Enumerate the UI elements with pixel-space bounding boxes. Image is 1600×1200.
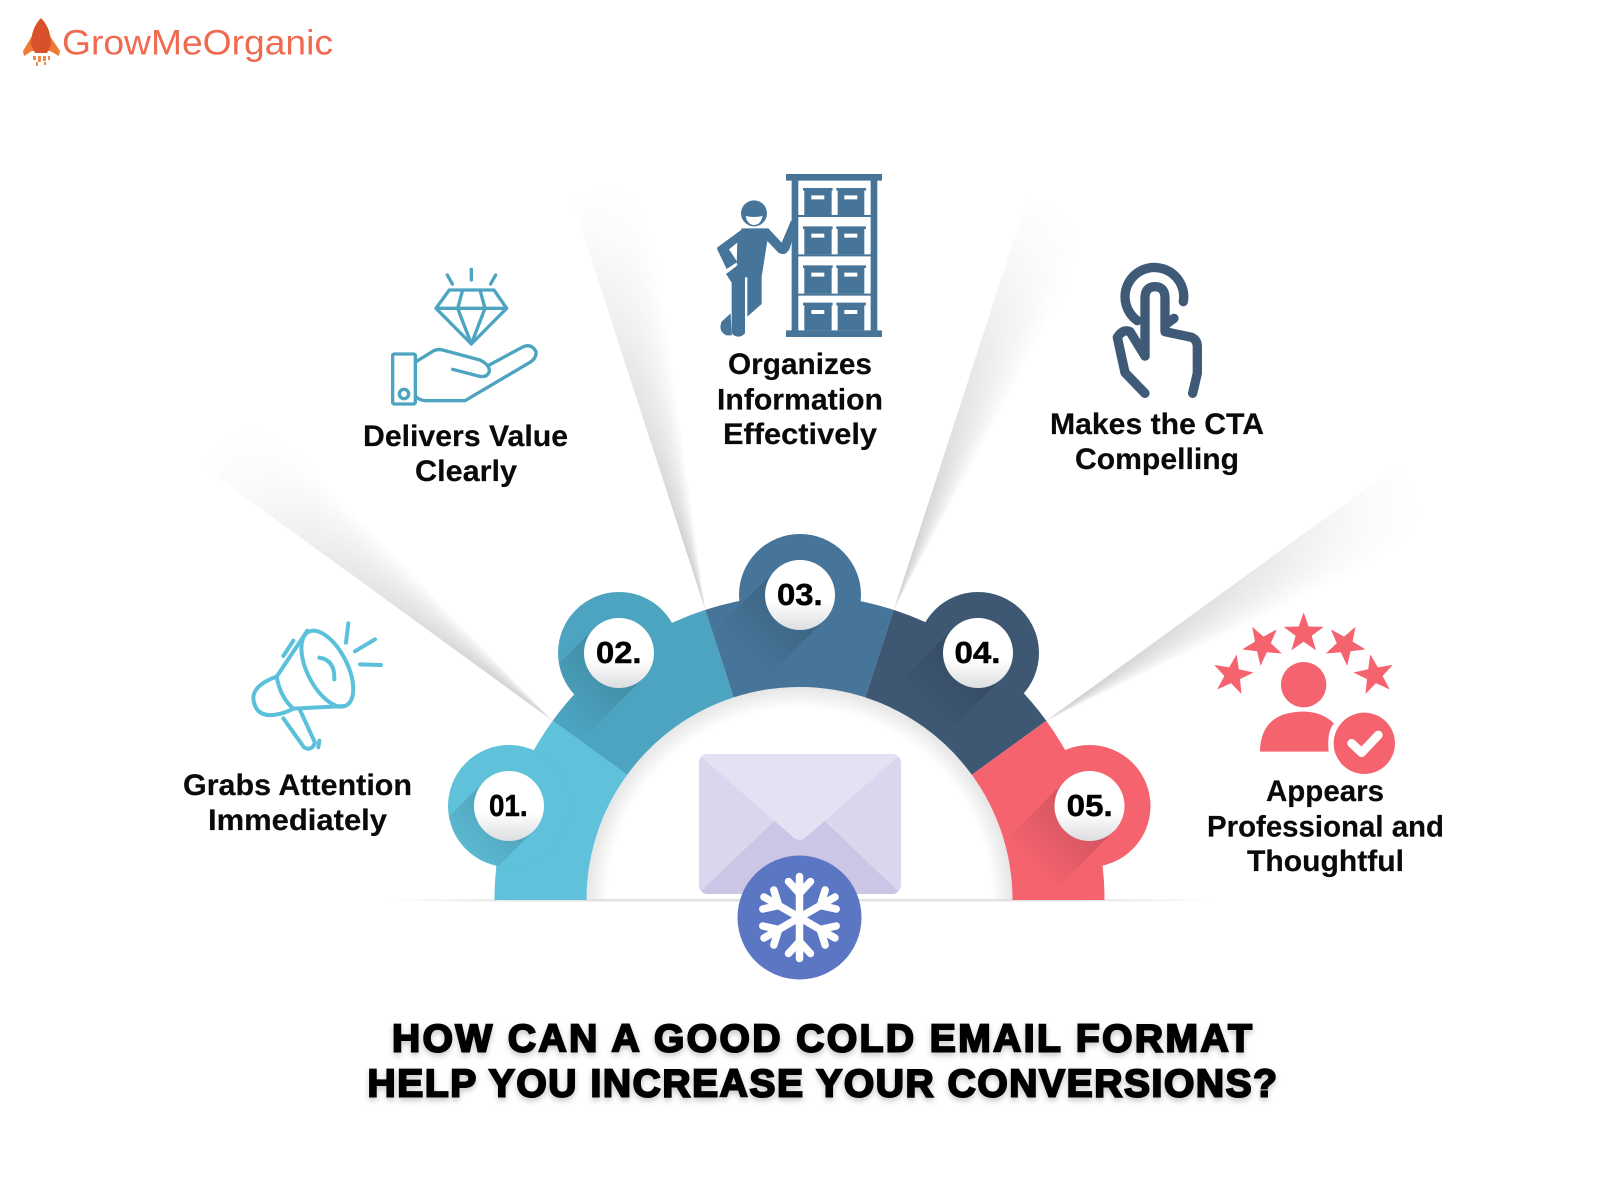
label: Delivers Value Clearly: Clearly <box>415 455 517 488</box>
rays: light shadows between segments <box>193 162 1453 785</box>
label: Organizes Information Effectively: Organizes <box>728 348 872 381</box>
icon: rated professional <box>1210 612 1397 774</box>
label: Organizes Information Effectively: Effectively <box>723 418 877 451</box>
number badge 05 <box>1054 771 1124 841</box>
label: Appears Professional and Thoughtful: Professional and <box>1207 810 1444 844</box>
check badge <box>1334 713 1395 774</box>
number badge 04 <box>943 618 1013 688</box>
title: HELP YOU INCREASE YOUR CONVERSIONS? <box>368 1062 1277 1106</box>
label: Grabs Attention Immediately <box>183 769 412 837</box>
icon: rocket <box>23 18 60 66</box>
label: Appears Professional and Thoughtful: Thoughtful <box>1247 845 1404 878</box>
number badge 03 <box>765 560 835 630</box>
person head <box>741 200 767 226</box>
title <box>368 1018 1277 1106</box>
icon: envelope <box>698 754 901 894</box>
number badge 02: 02. <box>596 635 642 670</box>
icon: person leaning on shelves <box>717 174 882 337</box>
label: Delivers Value Clearly <box>363 420 568 488</box>
label: Makes the CTA Compelling: Compelling <box>1075 443 1239 476</box>
label: Organizes Information Effectively <box>717 348 883 451</box>
label: Makes the CTA Compelling: Makes the CTA <box>1050 408 1264 441</box>
segment 04 <box>865 592 1046 775</box>
number badge 03: 03. <box>777 577 823 612</box>
icon: hand holding diamond <box>393 269 536 404</box>
shelf boxes <box>803 188 866 330</box>
number badge 05: 05. <box>1067 788 1113 823</box>
label: Makes the CTA Compelling <box>1050 408 1264 476</box>
inner arch shadow <box>586 687 1012 900</box>
icon: megaphone <box>253 623 381 749</box>
label: Organizes Information Effectively: Information <box>717 384 883 416</box>
number badge 02 <box>584 618 654 688</box>
label: Grabs Attention Immediately: Immediately <box>208 804 387 837</box>
segment 01 <box>448 720 628 900</box>
segment 03 <box>703 534 894 697</box>
label: Appears Professional and Thoughtful <box>1207 775 1444 878</box>
segment 05 <box>972 721 1150 903</box>
number badge 01 <box>474 771 544 841</box>
person body <box>717 221 798 337</box>
title: HOW CAN A GOOD COLD EMAIL FORMAT <box>392 1018 1252 1060</box>
number badge 04: 04. <box>954 635 1000 670</box>
shelf frame <box>786 174 882 337</box>
person <box>1260 662 1334 752</box>
icon: snowflake badge <box>738 856 862 980</box>
five stars <box>1210 612 1397 695</box>
segment 02 <box>552 592 734 775</box>
logo wordmark: GrowMeOrganic <box>62 24 333 62</box>
number badge 01: 01. <box>489 788 528 823</box>
label: Delivers Value Clearly: Delivers Value <box>363 420 568 453</box>
icon: finger tap <box>1117 267 1197 393</box>
label: Appears Professional and Thoughtful: Appears <box>1266 775 1384 808</box>
ground line <box>388 899 1214 902</box>
logo: GrowMeOrganic <box>23 18 333 66</box>
label: Grabs Attention Immediately: Grabs Attention <box>183 769 412 802</box>
